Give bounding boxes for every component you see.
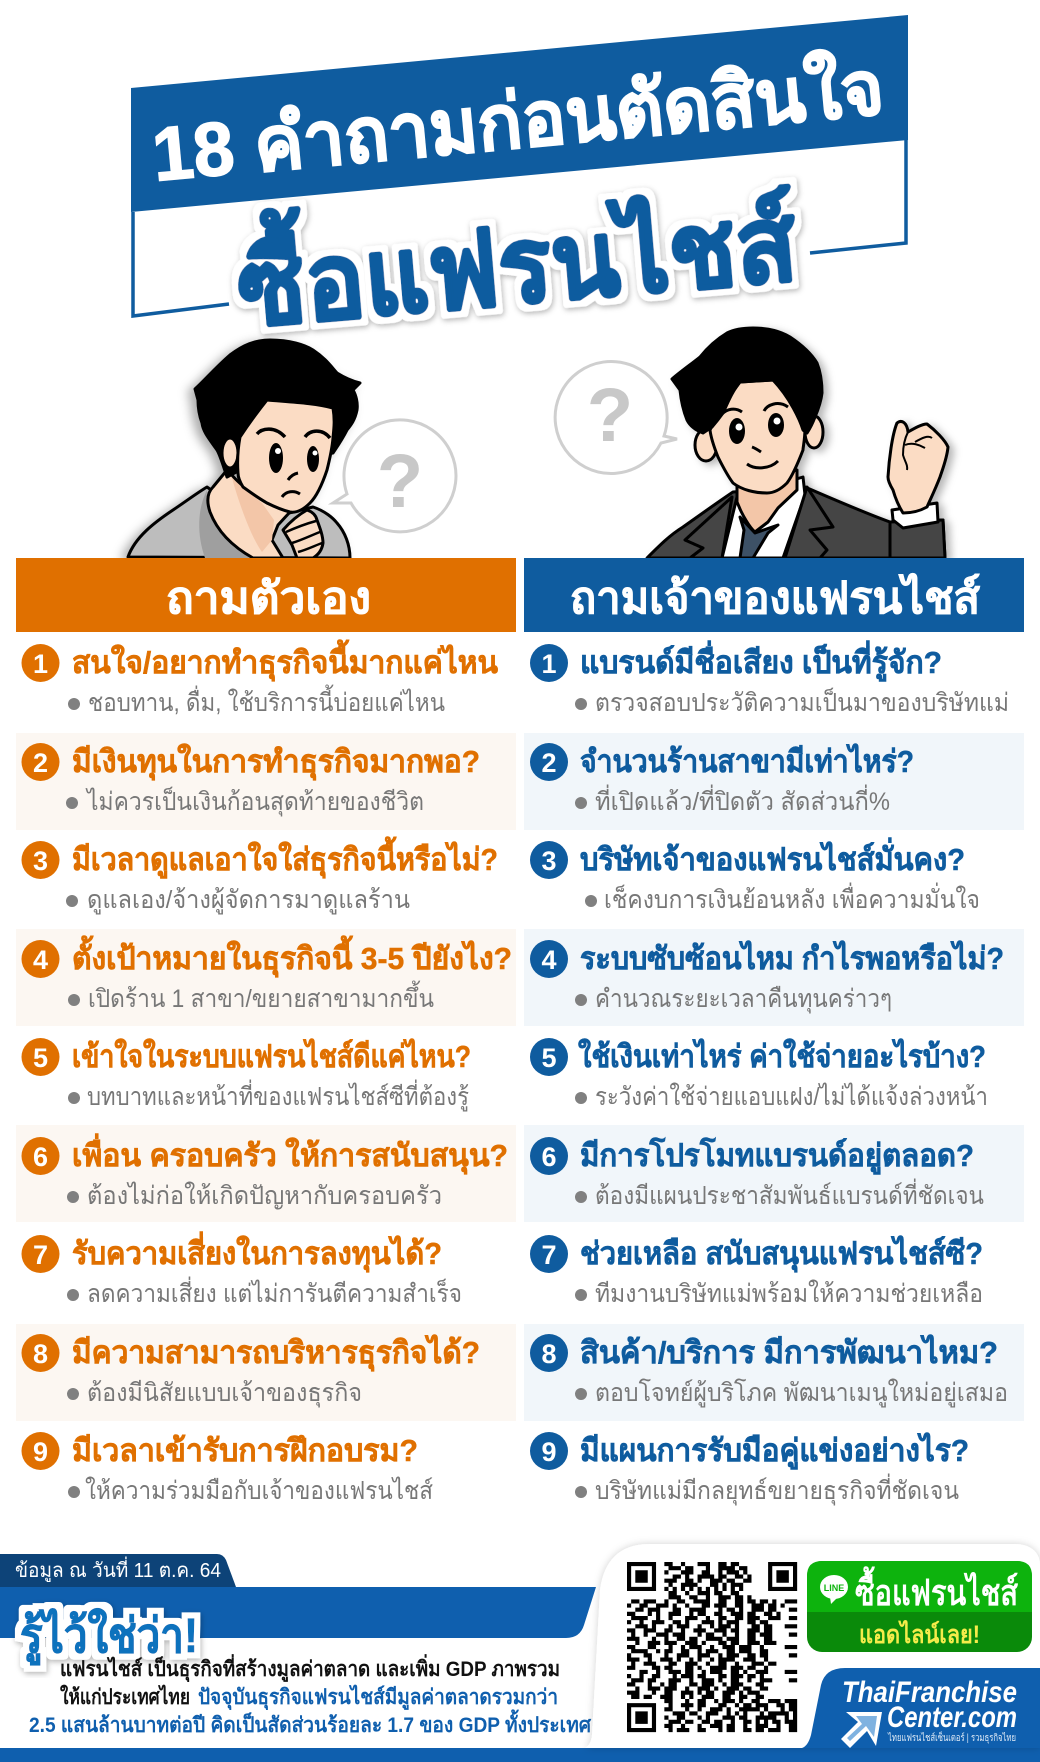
right question 8: 8 — [541, 1339, 557, 1369]
heading: ask yourself: ถามตัวเอง — [166, 574, 371, 623]
logo arrow — [841, 1712, 882, 1748]
right question 6: มีการโปรโมทแบรนด์อยู่ตลอด? — [580, 1137, 974, 1175]
left question 3: 3 — [33, 846, 48, 876]
eyebrows — [722, 404, 788, 414]
footer paragraph: ปัจจุบันธุรกิจแฟรนไชส์มีมูลค่าตลาดรวมกว่า — [198, 1684, 558, 1711]
left question 7 — [22, 1231, 462, 1308]
left question 2 — [22, 743, 480, 817]
left question 4: 4 — [33, 945, 48, 975]
footer paragraph: 2.5 แสนล้านบาทต่อปี คิดเป็นสัดส่วนร้อยละ 1.7 ของ GDP ทั้งประเทศ — [29, 1709, 592, 1737]
right question 9: 9 — [541, 1437, 557, 1467]
nose and mouth — [747, 447, 778, 468]
left question 7: 7 — [33, 1240, 48, 1270]
right question 2: 2 — [541, 748, 557, 778]
right question 7: 7 — [541, 1240, 557, 1270]
neck — [737, 470, 797, 532]
right question 1: 1 — [541, 649, 557, 679]
left question 3: ดูแลเอง/จ้างผู้จัดการมาดูแลร้าน — [87, 886, 410, 915]
shirt — [722, 477, 805, 558]
ThaiFranchise logo — [802, 1668, 1040, 1748]
fingers — [286, 521, 322, 552]
left question 6 — [22, 1133, 508, 1210]
neck shade — [232, 478, 274, 552]
footer paragraph — [29, 1653, 592, 1737]
eyes — [269, 443, 319, 473]
footer paragraph: ให้แก่ประเทศไทย — [60, 1684, 190, 1709]
title blue ribbon — [131, 15, 908, 212]
left question 7: รับความเสี่ยงในการลงทุนได้? — [72, 1231, 442, 1273]
right question 3 — [530, 837, 980, 914]
left question 8 — [22, 1334, 480, 1408]
speech bubble: left question: ? — [377, 439, 423, 524]
left question 2: 2 — [33, 748, 48, 778]
left question 4 — [22, 935, 512, 1013]
collar shade — [199, 490, 253, 558]
title banner — [131, 15, 908, 349]
right question 9: มีแผนการรับมือคู่แข่งอย่างไร? — [580, 1432, 969, 1470]
illustration: thinking man — [128, 340, 360, 558]
QR code — [627, 1562, 797, 1732]
left question 2: ไม่ควรเป็นเงินก้อนสุดท้ายของชีวิต — [85, 786, 424, 817]
left question 4: ตั้งเป้าหมายในธุรกิจนี้ 3-5 ปียังไง? — [72, 935, 512, 978]
jacket — [647, 487, 945, 558]
hair — [195, 340, 360, 477]
face — [238, 400, 334, 512]
ear right — [805, 416, 823, 448]
left question 5: 5 — [33, 1043, 48, 1073]
hand — [283, 510, 323, 558]
left question 5 — [22, 1038, 471, 1112]
left question 1 — [22, 639, 498, 717]
right question 9 — [530, 1432, 969, 1506]
speech bubble: right question: ? — [587, 373, 633, 458]
left question 9 — [22, 1432, 433, 1505]
right question 8: สินค้า/บริการ มีการพัฒนาไหม? — [580, 1334, 998, 1370]
right question 8 — [530, 1334, 1008, 1408]
right question 1: แบรนด์มีชื่อเสียง เป็นที่รู้จัก? — [580, 640, 942, 682]
right question 7: ทีมงานบริษัทแม่พร้อมให้ความช่วยเหลือ — [595, 1279, 983, 1308]
row backgrounds left — [16, 733, 516, 1421]
panel: ask franchisor header — [524, 558, 1024, 632]
fist — [888, 421, 948, 513]
left question 7: ลดความเสี่ยง แต่ไม่การันตีความสำเร็จ — [87, 1276, 462, 1308]
add line text: แอดไลน์เลย! — [859, 1619, 980, 1649]
logo wordmark: ThaiFranchise — [842, 1676, 1017, 1709]
left question 1: ชอบทาน, ดื่ม, ใช้บริการนี้บ่อยแค่ไหน — [88, 684, 445, 717]
right question 3: เช็คงบการเงินย้อนหลัง เพื่อความมั่นใจ — [604, 882, 980, 914]
left question 6: 6 — [33, 1142, 48, 1172]
LINE button top — [807, 1561, 1032, 1612]
left question 5: เข้าใจในระบบแฟรนไชส์ดีแค่ไหน? — [72, 1038, 471, 1074]
left question 2: มีเงินทุนในการทำธุรกิจมากพอ? — [72, 743, 480, 781]
ear left — [695, 429, 717, 461]
title box outline — [133, 140, 906, 316]
eyebrows — [257, 429, 330, 438]
title line 2: ซื้อแฟรนไชส์ — [231, 165, 801, 349]
lapel right — [785, 487, 833, 558]
hair — [672, 328, 822, 433]
sleeve — [890, 520, 945, 558]
right question 6 — [530, 1137, 984, 1210]
right question 4: ระบบซับซ้อนไหม กำไรพอหรือไม่? — [580, 940, 1004, 976]
eyes — [729, 413, 784, 444]
right question 5 — [530, 1038, 988, 1111]
left question 8: มีความสามารถบริหารธุรกิจได้? — [72, 1334, 480, 1372]
left question 9: มีเวลาเข้ารับการฝึกอบรม? — [72, 1433, 418, 1468]
QR finder patterns — [627, 1562, 797, 1732]
title line 1: 18 คำถามก่อนตัดสินใจ — [149, 43, 887, 198]
right question 4: คำนวณระยะเวลาคืนทุนคร่าวๆ — [595, 985, 892, 1014]
footer blue band — [0, 1587, 596, 1638]
right question 6: ต้องมีแผนประชาสัมพันธ์แบรนด์ที่ชัดเจน — [595, 1178, 984, 1210]
right question 1 — [530, 640, 1009, 717]
footer bottom bar — [0, 1748, 1040, 1762]
right question 2: จำนวนร้านสาขามีเท่าไหร่? — [580, 743, 914, 779]
right question 2: ที่เปิดแล้ว/ที่ปิดตัว สัดส่วนกี่% — [595, 784, 890, 816]
right question 2 — [530, 743, 914, 816]
right question 5: ใช้เงินเท่าไหร่ ค่าใช้จ่ายอะไรบ้าง? — [578, 1038, 986, 1074]
LINE button — [807, 1561, 1032, 1652]
right question 5: 5 — [541, 1043, 557, 1073]
panel: ask yourself header — [16, 558, 516, 632]
left question 8: ต้องมีนิสัยแบบเจ้าของธุรกิจ — [87, 1379, 362, 1408]
right question 1: ตรวจสอบประวัติความเป็นมาของบริษัทแม่ — [595, 687, 1009, 717]
LINE icon: LINE — [824, 1583, 844, 1593]
right question 4: 4 — [541, 945, 557, 975]
left question 6: เพื่อน ครอบครัว ให้การสนับสนุน? — [72, 1133, 508, 1175]
illustration: businessman — [647, 328, 948, 558]
speech bubble: left question — [333, 420, 456, 532]
left question 3: มีเวลาดูแลเอาใจใส่ธุรกิจนี้หรือไม่? — [72, 836, 498, 879]
speech bubble: right question — [555, 361, 677, 473]
neck and chest — [208, 470, 290, 558]
face — [710, 380, 805, 493]
left question 4: เปิดร้าน 1 สาขา/ขยายสาขามากขึ้น — [88, 980, 434, 1013]
left question 1: สนใจ/อยากทำธุรกิจนี้มากแค่ไหน — [72, 639, 498, 682]
left question 1: 1 — [33, 649, 48, 679]
left question 9: ให้ความร่วมมือกับเจ้าของแฟรนไชส์ — [85, 1476, 433, 1505]
lapel left — [685, 497, 732, 558]
footer date tab — [0, 1554, 236, 1587]
ear — [222, 438, 238, 468]
heading: ask franchisor: ถามเจ้าของแฟรนไชส์ — [570, 572, 980, 623]
left question 6: ต้องไม่ก่อให้เกิดปัญหากับครอบครัว — [87, 1181, 442, 1210]
footer white panel — [585, 1544, 1040, 1748]
right question 4 — [530, 940, 1004, 1014]
right question 3: 3 — [541, 846, 557, 876]
fist finger lines — [903, 432, 932, 470]
left question 9: 9 — [33, 1437, 48, 1467]
QR modules — [627, 1564, 797, 1730]
shirt — [128, 487, 350, 558]
right question 8: ตอบโจทย์ผู้บริโภค พัฒนาเมนูใหม่อยู่เสมอ — [595, 1378, 1008, 1408]
nose and mouth — [282, 473, 300, 497]
right question 9: บริษัทแม่มีกลยุทธ์ขยายธุรกิจที่ชัดเจน — [595, 1473, 959, 1506]
right question 7: ช่วยเหลือ สนับสนุนแฟรนไชส์ซี? — [580, 1235, 983, 1273]
row backgrounds right — [524, 733, 1024, 1421]
cuff — [892, 503, 938, 528]
right question 7 — [530, 1235, 983, 1308]
tie — [740, 517, 778, 558]
left question 3 — [22, 836, 498, 915]
footer heading: did you know: รู้ไว้ใช่ว่า! — [20, 1607, 198, 1666]
footer paragraph: แฟรนไชส์ เป็นธุรกิจที่สร้างมูลค่าตลาด และเพิ่ม GDP ภาพรวม — [60, 1653, 560, 1683]
LINE icon — [820, 1575, 848, 1604]
left question 5: บทบาทและหน้าที่ของแฟรนไชส์ซีที่ต้องรู้ — [87, 1079, 469, 1112]
right question 5: ระวังค่าใช้จ่ายแอบแฝง/ไม่ได้แจ้งล่วงหน้า — [595, 1082, 988, 1111]
date text: ข้อมูล ณ วันที่ 11 ต.ค. 64 — [15, 1556, 221, 1583]
right question 3: บริษัทเจ้าของแฟรนไชส์มั่นคง? — [580, 837, 965, 877]
right question 6: 6 — [541, 1142, 557, 1172]
left question 8: 8 — [33, 1339, 48, 1369]
